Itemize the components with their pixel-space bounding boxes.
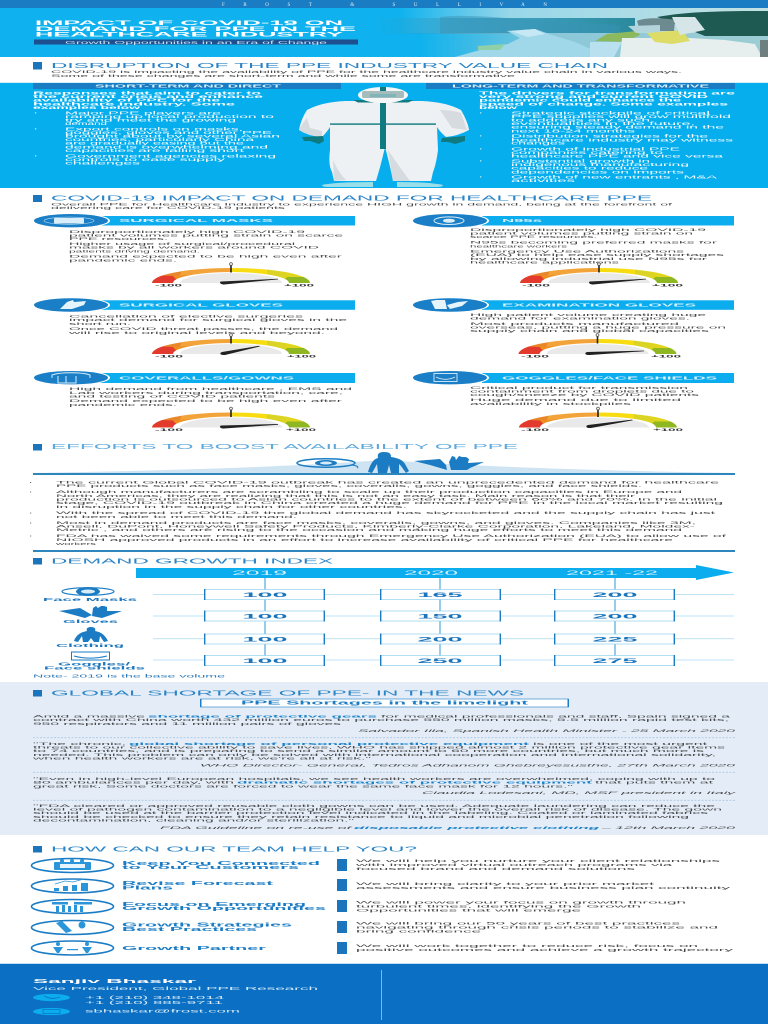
text block: efforts bullets: in disruption in the supply chain for other countries. [56,504,407,509]
title: IMPACT OF COVID-19 ON [35,20,345,27]
long-term column: Substantial growth in [511,159,653,164]
short-term column: controls to ease supply [65,157,229,162]
card: coveralls and gowns: pandemic ends. [69,402,177,407]
long-term column: below [479,105,520,110]
long-term column: • [480,146,482,151]
section heading: demand impact [33,194,675,210]
text block: efforts bullets: • [30,489,32,494]
long-term column: healthcare PPE and vice versa [511,153,726,158]
long-term column: PPE supplies will grow multifold [511,114,734,119]
news item: FDA: FDA Guideline on re-use of [160,825,355,830]
gauge: examination gloves: +100 [651,354,681,359]
long-term column: capacities to reduce [511,166,651,171]
news item: WHO: global shortage of personal protective equipment [129,741,532,746]
long-term column: • [480,134,482,139]
row: goggles and face shields: 100 [242,658,289,665]
card: coveralls and gowns [34,370,355,432]
section heading: disruption: COVID-19 is impacting the availability of PPE for the healthcare industry value chain in various ways. [51,69,682,74]
card: surgical masks: Disproportionately high COVID-19 [69,229,305,234]
gauge: surgical gloves: -100 [155,354,183,359]
short-term column: try and meet the growing [65,117,239,122]
card: surgical masks: Higher usage of surgical/procedural [69,241,295,246]
help row: growth strategies: Growth Strategies [122,923,293,929]
footer contact panel: sbhaskar@frost.com [85,1009,241,1014]
card: coveralls and gowns: Demand expected to be high even after [69,398,345,403]
text block: efforts bullets: With the spread of COVID-19 the global demand has skyrocketed and the supply chain has just [56,510,719,515]
text block: efforts bullets: Although manufacturers are scrambling to scale up their production capacities in Europe and [56,489,682,494]
section heading: disruption: DISRUPTION OF THE PPE INDUSTRY VALUE CHAIN [51,61,608,70]
section heading: news: GLOBAL SHORTAGE OF PPE- IN THE NEWS [51,688,525,697]
long-term column: Growth of industrial PPE [511,146,681,151]
short-term column: SHORT-TERM AND DIRECT [95,84,282,88]
icon: N95 respirator [434,217,464,224]
row: gloves: 150 [418,614,464,620]
card: surgical gloves: SURGICAL GLOVES [119,302,283,308]
footer contact panel [0,963,768,1024]
text block: efforts bullets: NIOSH approved products in an effort to increase availability of critical PPE for healthcare [56,537,673,542]
short-term column: the current crisis and enhance [33,94,266,99]
short-term column: goggles, gloves and other PPE [65,130,273,135]
icon: phone [33,994,70,1001]
long-term column: • [480,174,482,179]
section heading: efforts: EFFORTS TO BOOST AVAILABILITY OF PPE [51,442,519,451]
top bar with logo: FROST & SULLIVAN [222,3,547,8]
card: N95s: (EUA) to help ease supply shortages [470,252,724,257]
long-term column: very strong and current COVID [479,94,708,99]
icon: coverall figure [368,452,409,473]
long-term column: • [480,110,482,115]
gauge: surgical gloves [151,334,316,359]
short-term column: brought about by several Asian [65,134,283,139]
news item: FDA: disposable protective clothing [354,825,602,830]
gauge: surgical gloves: +100 [287,354,316,359]
short-term column [33,83,341,166]
long-term column: eventualities in the future, [511,121,695,126]
news item: FDA: should be checked to ensure they retain resistance to liquid and microbial penetration following [33,814,689,819]
help row: growth strategies: bring confidence [356,928,481,934]
news item: WHO: when health workers are at risk, we're all at risk." [33,756,373,760]
long-term column: companies catering to [511,150,666,155]
short-term column: capacities are falling short [65,148,247,153]
help row: revise forecast: We will bring clarity to your prior market [356,881,658,886]
icon: mask [297,459,358,468]
text block: efforts bullets: Ansell, DuPont, Honeywell Safety Products, Kimberly-Clarke Corporation, Lakeland, Moldex- [56,524,698,528]
title: DEMAND FOR PPE IN THE [35,26,356,33]
arrow: timeline [136,565,734,580]
section heading: disruption: Some of these changes are short-term and while some are transformative [51,73,515,78]
card: N95s: patient volumes putting strain on [470,230,693,236]
card: examination gloves: supply chain and global capacities [470,328,709,333]
chart: demand growth index table [136,565,734,666]
news item: WHO: threats to our collective ability to save lives, WHO has shipped almost 2 million protective gear items [33,744,725,750]
news item: MSF: that puts them at [595,780,717,784]
short-term column: • [35,110,37,115]
section heading: news [33,688,525,697]
index row labels and icons: Gloves [63,619,120,624]
text block: efforts bullets: PPE products such as face masks, gloves, coveralls, gowns, goggles, and face shields. [56,483,642,488]
row: face masks [204,589,675,600]
short-term column: countries, particularly China [65,137,257,142]
index row labels and icons: Clothing [56,643,125,648]
news item: MSF: 80 ambulances per day, with [33,780,234,784]
text block: efforts bullets: Metric , and others are rising to the occasion and making huge efforts to meet this demand [56,527,682,532]
news item: Spain [33,714,738,733]
news item: FDA: decontamination, cleaning and/or sterilization." [33,818,356,822]
help row: revise forecast: assessments and ensure business plan continuity [356,885,730,890]
text block: efforts bullets: FDA has waived some requirements through Emergency Use Authorization (EUA) to allow use of [56,533,730,538]
short-term column: challenges [65,161,140,166]
gauge: coveralls: -100 [155,427,183,432]
news item: FDA: level of pathogen contamination to a negligible level and lower the overall risk of disease. The gown [33,806,722,812]
text block: efforts bullets: workers [56,541,96,546]
card: examination gloves: EXAMINATION GLOVES [502,302,696,308]
gauge: coveralls [151,407,316,432]
short-term column: Government agencies relaxing [65,153,279,158]
card: N95s: Emergency Use Authorizations [470,248,684,254]
footer contact panel: +1 (210) 885-9711 [85,1000,225,1005]
card: examination gloves [413,298,734,359]
help row: keep connected: Keep You Connected [122,861,320,867]
row: clothing: 100 [242,636,289,644]
row: clothing: 200 [418,636,464,644]
text block: efforts bullets: North Americas, they are realizing that this is not an easy task. Main reason is that their [56,493,638,498]
row: clothing: 225 [592,636,639,644]
help row: growth strategies: navigating through crisis periods to stabilize and [356,924,718,930]
card: N95s: by allowing industrial use N95s for [470,256,710,261]
row: face masks: 100 [242,592,289,599]
card: coveralls and gowns: Lab workers during transportation, care, [69,390,343,395]
card: coveralls and gowns: COVERALLS/GOWNS [119,375,294,380]
help row: emerging opportunities: turbulent times, identifying the Growth [356,904,641,908]
row: goggles and face shields: 250 [418,658,464,665]
section heading: efforts [33,442,519,451]
section heading: team help: HOW CAN OUR TEAM HELP YOU? [51,845,417,854]
icon: examination gloves [431,300,468,309]
section heading: demand growth index [33,557,334,566]
gauge: N95s: +100 [652,283,683,288]
short-term column: ramping up local production to [65,114,277,119]
long-term column: LONG-TERM AND TRANSFORMATIVE [452,84,710,88]
help row: keep connected: We will help you nurture your client relationships [356,858,720,863]
help row: emerging opportunities: Growth Opportunities [122,906,327,912]
banner: limelight [200,699,569,707]
top bar with logo [0,0,768,8]
title [35,20,356,39]
news item: WHO: "The chronic, [33,741,126,746]
short-term column: demand [65,121,109,126]
help row: emerging opportunities: Focus on Emerging [122,902,306,908]
card: examination gloves: demand for examination gloves. [470,316,690,320]
card: surgical masks: patient volumes putting strain on scarce [69,232,343,238]
long-term column: Distribution strategies for the [511,134,711,139]
section heading: demand impact: COVID-19 IMPACT ON DEMAND FOR HEALTHCARE PPE [51,194,653,203]
title: HEALTHCARE INDUSTRY [35,32,347,39]
help row: emerging opportunities [32,900,686,914]
news item: MSF: dramatic shortages of protective equipment [237,780,595,784]
text block: efforts bullets: Most in demand products are face masks, coveralls, gowns, and gloves. Companies like 3M, [56,520,696,525]
arrow: timeline: 2019 [232,571,290,577]
gauge: surgical masks: +100 [284,283,314,288]
news item: FDA [33,803,738,830]
card: goggles and face shields: Critical product for transmission [470,385,688,390]
long-term column: Growth of new entrants , M&A [511,174,718,179]
text block: efforts bullets: • [30,520,32,525]
icon: opportunities [32,900,114,914]
footer contact panel: Sanjiv Bhaskar [33,979,199,985]
card: surgical gloves [34,298,355,359]
short-term column: availability of PPE for the [33,98,223,103]
panel: value chain [0,82,768,188]
row: face masks: 200 [592,592,639,599]
gauge: N95s: -100 [522,283,550,288]
news item: MSF [33,776,739,795]
card: goggles and face shields: containment from droplets due to [470,388,694,394]
text block: efforts bullets: The current Global COVID-19 outbreak has created an unprecedented demand for healthcare [56,479,719,484]
card: surgical gloves: impact demand for surgical gloves in the [69,317,347,322]
index row labels and icons: Face shields [44,666,147,671]
news item: MSF: "Even in high-level European hospitals, we see health workers are overwhelmed, coping with up to [33,776,715,781]
help row: keep connected [32,858,720,872]
long-term column: speed of change. Some examples [479,101,731,106]
card: examination gloves: overseas, putting a huge pressure on [470,324,726,330]
long-term column: The drivers for transformation are [479,90,738,95]
short-term column: examples below [33,105,143,110]
short-term column: Major PPE players are [65,110,224,115]
card: surgical masks: SURGICAL MASKS [119,218,273,223]
hill backdrop with icons [33,452,735,475]
short-term column: • [35,153,37,158]
help row: revise forecast: Revise Forecast [122,881,274,887]
arrow: timeline: 2021 -22 [566,571,661,577]
card: surgical masks: PPE resources. [69,236,168,241]
icon: forecast [32,879,114,893]
news item: WHO: to 74 countries, and is preparing to send a similar amount to 60 more countries, but much more is [33,748,704,753]
help row: growth partner: Growth Partner [122,946,266,952]
card: coveralls and gowns: and testing of COVID patients [69,394,275,398]
help row: growth partner [32,941,733,955]
text block: efforts bullets: production is outsourced to Asian countries to the extent of between 60% and 70%. In the initial [56,496,718,502]
card: goggles and face shields: availability in stockpiles [470,401,631,406]
help row: growth strategies: We will bring our 50 years of best practices [356,920,680,926]
gauge: coveralls: +100 [286,427,316,432]
short-term column: demand is overwhelming and [65,144,271,149]
help row: growth partner: positive outcomes and achieve a growth trajectory [356,947,733,952]
card: surgical masks: Demand expected to be high even after [69,254,345,258]
subtitle bar: Growth Opportunities in an Era of Change [65,40,328,45]
text block: efforts bullets: not been able to meet this demand. [56,514,297,519]
long-term column: changes [511,141,565,146]
news item: FDA: – 12th March 2020 [598,825,738,830]
row: gloves [204,610,675,622]
long-term column: pandemic could enhance the [479,98,684,103]
help row: emerging opportunities: Opportunities that will emerge [356,908,581,912]
card: N95s: Disproportionately high COVID-19 [470,227,706,232]
section heading: team help [33,845,417,854]
help row: emerging opportunities: We will power your focus on growth through [356,900,686,904]
section heading: demand impact: Overall PPE for Healthcare Industry to experience HIGH growth in demand, being at the forefront of [51,202,675,207]
card: surgical gloves: Cancellation of elective surgeries [69,314,303,318]
panel: in the news [0,682,768,835]
news item: FDA: "FDA cleared or approved reusable cloth gowns can be used. Adequate laundering can reduce the [33,803,715,808]
card: surgical gloves: will rise to original levels and beyond. [69,330,325,335]
card: examination gloves: High patient volume creating huge [470,312,706,317]
icon: goggles [72,652,110,660]
news item: MSF: Claudia Lodesani, MD, MSF president in Italy [422,790,739,795]
icon: partners [32,941,114,955]
gauge: goggles: -100 [521,427,549,432]
text block: efforts bullets: • [30,479,32,484]
card: surgical gloves: short run. [69,321,131,326]
icon: coverall [52,373,90,383]
news item: FDA: should be used at the barrier protection level indicated in the labeling. Coated or laminated fabrics [33,810,708,815]
card: surgical masks [34,213,355,288]
long-term column: Strategic stockpile of critical [511,110,710,115]
row: gloves: 200 [592,614,639,620]
gauge: surgical masks: -100 [155,283,182,288]
card: coveralls and gowns: High demand from healthcare , EMS and [69,386,352,391]
icon: email [33,1008,70,1015]
icon: strategies [32,920,114,934]
text block: efforts bullets: stage, COVID-19 outbreak in China created a huge demand for PPE in the local market resulting [56,500,723,505]
long-term column: healthcare industry may witness [511,137,733,142]
long-term column: indigenous manufacturing [511,162,692,167]
icon: gloves [59,606,122,618]
news item: Spain: 950 respirators and 11 million pairs of gloves [33,721,341,726]
gauge: examination gloves: -100 [521,354,549,359]
gauge: goggles: +100 [653,427,683,432]
card: N95s [413,213,734,288]
banner: limelight: PPE Shortages in the limelight [241,701,529,707]
news item: Spain: for medical professionals and staff, Spain signed a [381,714,733,718]
row: face masks: 165 [418,592,464,599]
help row: revise forecast: Plans [122,886,174,892]
gauge: N95s [519,263,683,288]
section heading: demand impact: delivering care for COVID-19 patients [51,205,285,210]
section heading: disruption [33,61,682,78]
hero banner [0,8,768,57]
long-term column: activities [511,178,575,183]
card: goggles and face shields: cough/sneeze by COVID patients [470,392,699,397]
news item: Spain: Salvador Illa, Spanish Health Minister - 25 March 2020 [358,728,738,733]
card: surgical masks: pandemic ends. [69,258,177,262]
gauge: goggles [518,407,683,432]
arrow: timeline: 2020 [404,571,461,577]
icon: face mask [62,587,114,596]
footer contact panel: Vice President, Global PPE Research [33,986,320,991]
subtitle bar [34,40,358,45]
row: gloves: 100 [242,614,289,620]
icon: clothing [74,627,108,642]
help row: growth partner: We will work together to reduce risk, focus on [356,943,698,948]
note: Note- 2019 is the base volume [33,673,227,678]
help row: keep connected: focused brand and demand solutions [356,866,635,871]
row: goggles and face shields [204,655,675,666]
long-term column: • [480,159,482,164]
help row: growth strategies: Best Practices [122,927,258,933]
long-term column [426,83,738,183]
index row labels and icons: Face Masks [43,597,139,602]
card: N95s: scarce PPE resources. [470,234,597,239]
index row labels and icons: Goggles/ [58,662,133,667]
section heading: demand growth index: DEMAND GROWTH INDEX [51,557,334,566]
news item: WHO: needed. This problem can only be solved with international cooperation and international solidarity, [33,752,716,757]
icon: goggles [434,374,457,382]
news item: Spain: Amid a massive [33,714,145,718]
long-term column: dependencies on imports [511,169,684,174]
card: surgical gloves: Once COVID threat passes, the demand [69,326,338,331]
news item: MSF: great risk, Some doctors are forced to wear the same face mask for 12 hours." [33,784,575,788]
card: goggles and face shields [413,370,734,432]
help row: revise forecast [32,879,730,893]
short-term column: • [35,126,37,131]
news item: Spain: contract with China worth 432 million euros to purchase 550 million masks, 5.5 million rapid test kits, [33,717,729,722]
card: N95s: healthcare applications [470,260,619,264]
short-term column: healthcare industry. Some [33,101,238,106]
gauge: examination gloves [518,334,681,359]
card: goggles and face shields: GOGGLES/FACE SHIELDS [502,375,717,380]
card: goggles and face shields: Huge demand due to limited [470,397,681,402]
card: surgical masks: masks by all workers around COVID [69,244,320,250]
text block: efforts bullets [30,479,730,546]
card: N95s: N95s becoming preferred masks for [470,240,720,244]
short-term column: are gradually easing but the [65,140,247,145]
short-term column: Export controls on masks, [65,126,243,131]
text block: efforts bullets: • [30,533,32,538]
icon: surgical glove [60,300,86,309]
icon: connected [32,858,114,872]
news item: WHO: is one of the most urgent [533,741,711,746]
row: clothing [204,634,675,644]
news item: WHO: WHO Director- General, Tedros Adhanom Ghebreyesusthe, 27th March 2020 [200,762,738,768]
card: N95s: healthcare workers [470,244,567,248]
card: surgical masks: patients driving demand. [69,248,200,254]
news item: Spain: shortage of protective gears [148,714,377,718]
card: N95s: N95s [502,218,544,223]
text block: efforts bullets: • [30,510,32,515]
short-term column: Responses that aim to cater to [33,90,263,95]
news item: WHO [33,741,738,768]
illustration: protective suit [299,87,469,187]
gauge: surgical masks [151,263,314,288]
icon: surgical mask [44,217,94,224]
card: examination gloves: Most products manufactured [470,321,679,326]
footer contact panel: +1 (210) 348-1014 [85,995,226,1000]
hero photo [375,8,768,57]
long-term column: ensuring steady demand in the [511,125,727,130]
icon: gloves [414,456,484,470]
row: goggles and face shields: 275 [592,658,639,665]
index row labels and icons [43,587,147,671]
long-term column: next 18-24 months [511,128,635,133]
long-term column: to address any such [511,117,653,122]
help row: keep connected: to Your Customers [122,865,300,871]
help row: keep connected: with improved virtual outreach programs via [356,862,675,867]
help row: growth strategies [32,920,718,934]
